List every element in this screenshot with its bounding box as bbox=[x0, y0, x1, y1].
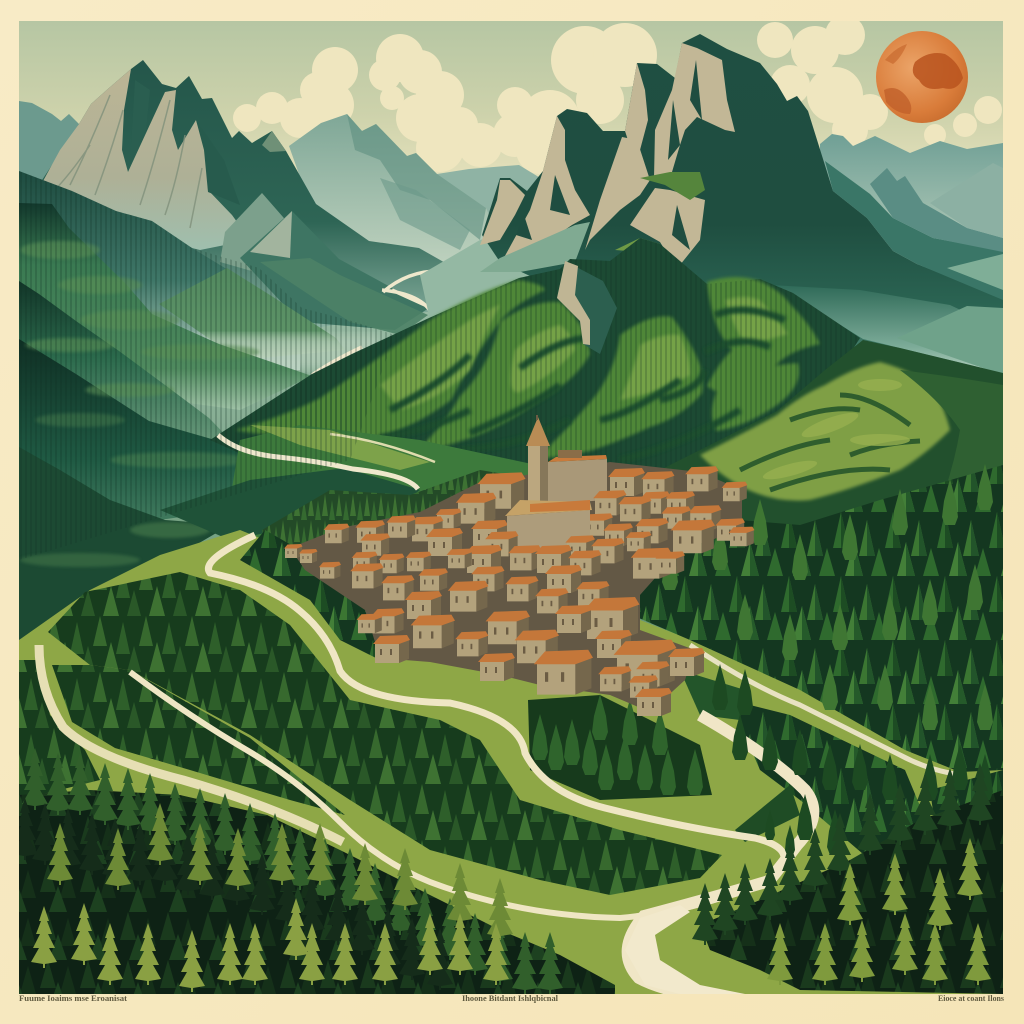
hatch overlay bbox=[240, 238, 856, 468]
caption left: Fuume Ioaims mse Eroanisat bbox=[19, 994, 127, 1003]
upper valley river bbox=[218, 435, 418, 489]
left hill 3 bbox=[19, 339, 238, 520]
main winding road bbox=[208, 535, 784, 868]
forest trees under village bbox=[532, 694, 703, 795]
river bend bbox=[312, 347, 362, 375]
sky bbox=[19, 21, 1003, 176]
fog backdrop bbox=[19, 312, 680, 640]
left hill 2 bbox=[19, 281, 222, 439]
left long forest bbox=[48, 572, 722, 895]
left hill 1 bbox=[19, 203, 312, 410]
far mountains left bbox=[19, 101, 79, 180]
bottom right forest bbox=[700, 790, 1003, 994]
rock faces bbox=[480, 43, 735, 265]
inner peak 2 bbox=[240, 211, 429, 330]
mid-green trees left band bbox=[22, 748, 563, 994]
left main massif bbox=[19, 60, 456, 330]
right-valley forests bbox=[680, 670, 1003, 860]
cliff outcrop bbox=[564, 261, 617, 354]
tall tower bbox=[526, 415, 550, 505]
caption right: Eioce at coant Ilons bbox=[938, 994, 1004, 1003]
forest left edge bbox=[19, 660, 100, 800]
forest edge trees left bbox=[12, 798, 453, 990]
road light strip bbox=[39, 645, 343, 842]
rock striations bbox=[50, 95, 202, 228]
right forest bbox=[590, 465, 1003, 772]
mid teal slope bbox=[776, 286, 984, 368]
left hill 4 bbox=[19, 447, 230, 640]
small green hills bbox=[159, 258, 428, 360]
left green hill texture bbox=[20, 241, 260, 567]
right olive hill bbox=[665, 340, 1003, 525]
trees at bottom right dark bbox=[692, 763, 993, 945]
road center bbox=[130, 672, 720, 918]
moss ledges bbox=[640, 172, 705, 200]
small road upper bbox=[330, 434, 435, 462]
upper left forest on slope bbox=[240, 530, 400, 660]
rock skirts bbox=[44, 69, 236, 250]
upper far road bbox=[382, 270, 430, 311]
mid valley bbox=[160, 425, 528, 538]
right forest lighter trees bbox=[662, 464, 993, 730]
valley forest band bbox=[262, 470, 560, 590]
lower road bbox=[628, 715, 813, 998]
village shadow base bbox=[290, 462, 742, 712]
forest under village bbox=[528, 695, 712, 800]
caption center: Ihoone Bitdant Ishlqbicnal bbox=[462, 994, 559, 1003]
village bbox=[284, 415, 754, 716]
mist band bbox=[190, 335, 380, 369]
olive trees bottom right bbox=[767, 838, 991, 985]
olive trees bottom left bbox=[47, 803, 513, 940]
pale slope behind right rocks bbox=[420, 240, 528, 315]
inner peak 1 bbox=[220, 193, 284, 272]
right inner peaks bbox=[870, 168, 1003, 252]
moon bbox=[876, 31, 968, 123]
central far mountains bbox=[289, 114, 538, 262]
houses bbox=[324, 466, 754, 556]
nave bbox=[505, 500, 592, 552]
green patches bbox=[235, 277, 820, 459]
bottom left forest bbox=[19, 790, 615, 994]
right valley tree tips bbox=[712, 664, 993, 855]
valley floor bbox=[19, 530, 1003, 994]
right teal slope bbox=[825, 161, 1003, 300]
right road bbox=[690, 645, 962, 775]
forest between left roads bbox=[52, 665, 345, 815]
central green mountain bbox=[210, 238, 860, 490]
forest ribbing bbox=[378, 304, 788, 436]
hatch overlay on left hills bbox=[19, 171, 395, 560]
houses lower bbox=[284, 531, 705, 716]
far mountains right bbox=[820, 134, 1003, 214]
cathedral block bbox=[548, 450, 607, 504]
wide road end bbox=[625, 905, 745, 994]
light trees front left bbox=[31, 898, 509, 992]
teal ridge left bbox=[19, 171, 302, 370]
clouds bbox=[233, 15, 1002, 174]
right dark massif with rock towers bbox=[480, 34, 1003, 380]
